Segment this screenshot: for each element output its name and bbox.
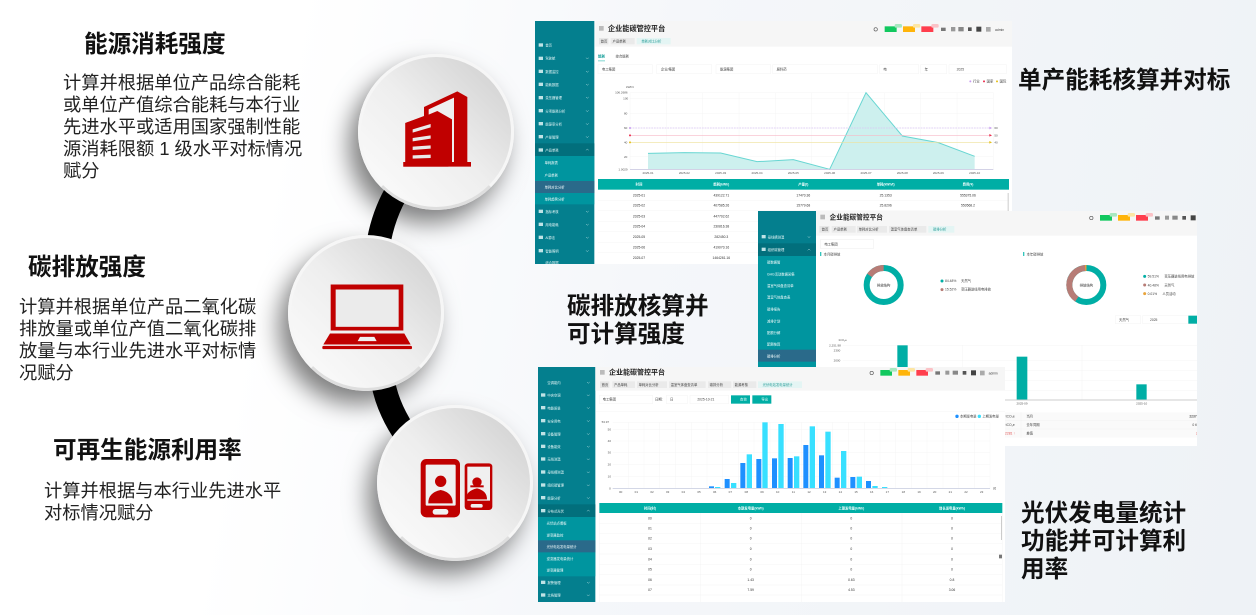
line chart: 1.0029 (618, 167, 628, 171)
sidebar (535, 21, 594, 265)
line chart: 40 (624, 141, 628, 145)
data table: 0.8 (950, 578, 954, 582)
panel: unit energy consumption screenshot: 能源集团 (720, 66, 734, 71)
sidebar: 配额核算 (767, 342, 781, 347)
data table: 0 (750, 557, 752, 561)
heading: energy intensity: 能源消耗强度 (84, 32, 226, 58)
data table: 0 (750, 537, 752, 541)
bar chart: PV generation: 20 (933, 490, 937, 494)
donut: monthly carbon emission: 天然气 (961, 278, 972, 283)
panel: unit energy consumption screenshot: 电工集团 (602, 66, 616, 71)
text block: carbon intensity: 计算并根据单位产品二氧化碳 (19, 296, 256, 317)
sidebar: AI算法 (545, 235, 556, 240)
summary rows: 差值 (1026, 431, 1034, 436)
line chart: 100 (623, 97, 628, 101)
data table: 282450.3 (714, 235, 728, 239)
header bar: 首页 (822, 227, 829, 232)
text block: carbon intensity (19, 296, 256, 383)
data table: 2025-06 (633, 246, 645, 250)
data table: 单耗(kWh/t) (877, 182, 895, 187)
data table: 0 (951, 547, 953, 551)
header bar: 碳排分析 (933, 227, 947, 232)
bar chart: PV generation: 10 (608, 474, 611, 478)
sidebar: 文档管理 (547, 593, 561, 598)
data table: 04 (648, 557, 652, 561)
bar chart: PV generation: 14 (839, 490, 842, 494)
bar chart: PV generation: 30 (608, 451, 611, 455)
data table: 25.8296 (880, 204, 892, 208)
bar chart: monthly carbon: 2000 (834, 358, 841, 362)
bar chart: PV generation: 00 (619, 490, 623, 494)
data table: 0 (750, 568, 752, 572)
text block: energy intensity: 计算并根据单位产品综合能耗 (63, 72, 300, 93)
header bar: 单耗对比分析 (639, 382, 659, 387)
filters (598, 65, 1006, 74)
line chart (615, 79, 1007, 175)
bar chart: PV generation: 18 (902, 490, 905, 494)
query filters: 电工集团 (603, 397, 617, 402)
data table: 0 (951, 557, 953, 561)
line chart: 2025-09 (933, 171, 944, 175)
data table: 0 (850, 547, 852, 551)
data table: 7.59 (747, 588, 754, 592)
bar chart: PV generation: 本期发电量 (960, 413, 977, 418)
summary rows: tCO₂e (1006, 423, 1015, 427)
data table: 3.06 (949, 588, 955, 592)
text block: carbon intensity: 况赋分 (19, 362, 74, 383)
sidebar (758, 211, 816, 446)
sidebar: 设备能效 (547, 444, 561, 449)
donut: yearly carbon emission: 变压器进线用电排放 (1164, 274, 1195, 279)
data table: 1.43 (747, 578, 754, 582)
donut: yearly carbon emission: 本年碳排放 (1027, 251, 1044, 256)
donut: monthly carbon emission: 变压器进线用电排放 (961, 287, 992, 292)
sidebar: 单耗报表 (545, 160, 559, 165)
bar chart: PV generation: 0 (609, 486, 611, 490)
data table: 2025-03 (633, 214, 645, 218)
header bar: admin (995, 28, 1004, 32)
sidebar: 用电能耗 (545, 222, 559, 227)
bar chart: PV generation: 09 (760, 490, 764, 494)
data table: 0 (951, 516, 953, 520)
header bar: 单耗对比分析 (859, 227, 879, 232)
sidebar: GHG活动数据采集 (767, 271, 795, 276)
sidebar: 电能质量 (547, 405, 561, 410)
bar chart: monthly carbon (829, 338, 1197, 405)
bar chart: PV generation: 11 (792, 490, 795, 494)
data table: 时间(时) (644, 505, 656, 510)
line chart: 2025-08 (897, 171, 908, 175)
bar chart: PV generation: 19 (917, 490, 921, 494)
header bar: 首页 (602, 382, 609, 387)
sidebar: 分布式光伏 (547, 508, 565, 513)
bar chart: PV generation: 16 (870, 490, 874, 494)
header bar: 温室气体盘查清单 (891, 227, 918, 232)
tabs: 综合能耗 (616, 53, 630, 58)
data table: 增长发电量(kWh) (939, 505, 965, 510)
label: unit energy consumption: 单产能耗核算并对标 (1018, 68, 1230, 94)
panel: unit energy consumption screenshot: 年 (925, 66, 929, 71)
donut: yearly carbon emission: 59.51% (1148, 275, 1159, 279)
data table: 03 (648, 547, 652, 551)
data table: 0 (850, 537, 852, 541)
bar chart: PV generation: 03 (666, 490, 670, 494)
label: photovoltaic statistics: 功能并可计算利 (1021, 529, 1186, 555)
tabs: 能耗 (598, 53, 605, 58)
bar chart: PV generation: 12 (807, 490, 811, 494)
line chart: 50 (994, 133, 998, 137)
sidebar: 光伏站点看板 (547, 521, 567, 526)
data table: 产量(t) (798, 182, 808, 187)
bar chart: monthly carbon: 2300 (834, 349, 841, 353)
sidebar: 光伏电站发电量统计 (547, 544, 577, 549)
label: photovoltaic statistics: 光伏发电量统计 (1021, 501, 1186, 527)
line chart: 2025-07 (860, 171, 872, 175)
header bar (816, 211, 1197, 236)
sidebar: 安全用电 (547, 418, 561, 423)
line chart: 60 (994, 126, 998, 130)
sidebar: 单耗趋势分析 (545, 196, 565, 201)
data table: 0.63 (848, 578, 855, 582)
icon: building (403, 91, 471, 167)
summary rows: 去年同期 (1026, 422, 1040, 427)
line chart: 2025-04 (751, 171, 763, 175)
data table: 407585.26 (713, 204, 729, 208)
bar chart: PV generation: 40 (608, 439, 611, 443)
query filters: 导出 (761, 397, 768, 402)
donut: monthly carbon emission: 本月碳排放 (824, 251, 841, 256)
sidebar: 设备管理 (547, 431, 561, 436)
panel: unit energy consumption screenshot (535, 21, 1012, 264)
circle: laptop (288, 235, 444, 391)
data table: 2025-02 (633, 204, 645, 208)
bar chart: PV generation: 06 (713, 490, 717, 494)
query filters: 日期: (655, 397, 663, 402)
bar chart: PV generation: 08 (745, 490, 748, 494)
sidebar: 无线测温 (547, 457, 561, 462)
data table: 0 (850, 557, 852, 561)
circle: devices (377, 405, 533, 561)
bar chart: PV generation: 22 (964, 490, 968, 494)
sidebar: 单耗对比分析 (545, 184, 565, 189)
data table: 01 (648, 527, 652, 531)
header bar: 产品单耗 (614, 382, 628, 387)
sidebar: 逆变器管理 (547, 568, 564, 573)
header bar: 企业能碳管控平台 (608, 24, 665, 33)
bar chart: PV generation: 50 (608, 427, 611, 431)
header bar: 光伏电站发电量统计 (763, 382, 793, 387)
sidebar: 配额分解 (767, 330, 781, 335)
panel: unit energy consumption screenshot: 企业/集团 (661, 66, 676, 71)
bar chart: monthly carbon: 2025-10 (1136, 401, 1148, 405)
chart filters: 天然气 (1119, 317, 1130, 322)
data table (598, 179, 1009, 264)
data table: 230816.38 (713, 225, 729, 229)
bar chart: PV generation: 15 (854, 490, 858, 494)
sidebar: 分项能耗分析 (545, 108, 566, 113)
query filters: 查询 (740, 397, 747, 402)
sidebar: 产量管理 (545, 134, 559, 139)
line chart: 2025-06 (824, 171, 836, 175)
text block: renewable energy ratio: 对标情况赋分 (44, 502, 154, 523)
data table: 0 (850, 527, 852, 531)
data table: 0 (750, 547, 752, 551)
label: carbon accounting: 可计算强度 (567, 322, 685, 348)
header bar: admin (989, 372, 998, 376)
line chart: 2025-03 (715, 171, 727, 175)
label: carbon accounting (567, 293, 709, 348)
sidebar: 碳排报告 (767, 307, 781, 312)
label: photovoltaic statistics: 用率 (1021, 557, 1068, 583)
text block: renewable energy ratio: 计算并根据与本行业先进水平 (44, 480, 281, 501)
sidebar: 智能照明 (545, 248, 559, 253)
sidebar: 能源审分析 (545, 121, 563, 126)
donut: monthly carbon emission: 排放结构 (877, 282, 891, 287)
sidebar: 减排计划 (767, 318, 781, 323)
sidebar: 空调能内 (547, 380, 561, 385)
line chart: 2025-01 (642, 171, 654, 175)
panel: carbon accounting screenshot (758, 211, 1197, 446)
data table: 02 (648, 537, 652, 541)
text block: energy intensity: 先进水平或适用国家强制性能 (63, 116, 300, 137)
line chart: 80 (624, 111, 628, 115)
sidebar: 组织碳管理 (768, 247, 785, 252)
header bar (595, 367, 1005, 391)
line chart: 行业 (973, 79, 980, 84)
heading: carbon intensity: 碳排放强度 (28, 255, 146, 281)
panel: unit energy consumption screenshot: 原料药 (777, 66, 787, 71)
bar chart: PV generation: 17 (886, 490, 889, 494)
sidebar: 指标考核 (545, 209, 559, 214)
bar chart: monthly carbon: 2025-09 (1016, 401, 1028, 405)
data table: 17470.36 (796, 193, 810, 197)
summary rows: 2281 ↑ (1005, 432, 1015, 436)
query filters (596, 395, 1005, 411)
header bar: 产品单耗 (834, 227, 848, 232)
data table: 0 (750, 516, 752, 520)
sidebar: 母线槽测温 (547, 470, 565, 475)
text block: renewable energy ratio (44, 480, 281, 523)
data table: 06 (648, 578, 652, 582)
sidebar: 母线槽测温 (768, 234, 785, 239)
panel: unit energy consumption screenshot: 2025 (957, 67, 964, 71)
data table: 447702.62 (713, 214, 729, 218)
data table: 时间 (636, 182, 643, 187)
bar chart: monthly carbon: tCO₂e (839, 338, 847, 342)
donut: monthly carbon emission (820, 251, 992, 309)
connector: black curved links between circles (368, 190, 410, 436)
data table: 0 (850, 568, 852, 572)
data table: 费用(¥) (963, 182, 973, 187)
donut: monthly carbon emission: 15.52% (945, 288, 956, 292)
panel: unit energy consumption screenshot: 电 (883, 66, 887, 71)
chart filters: 2025 (1150, 318, 1158, 322)
sidebar: 逆变器监控 (547, 532, 564, 537)
line chart: 106.2686 (615, 91, 628, 95)
line chart: 40 (994, 141, 998, 145)
bar chart: PV generation: 02 (650, 490, 654, 494)
sidebar: 能源分析 (547, 495, 561, 500)
sidebar: 报警管理 (547, 580, 561, 585)
sidebar: 能耗数据 (545, 82, 559, 87)
header bar: 企业能碳管控平台 (830, 213, 883, 222)
line chart: 2025-02 (679, 171, 690, 175)
data table: 0 (850, 516, 852, 520)
bar chart: PV generation: 04 (682, 490, 685, 494)
circle: building (358, 54, 514, 210)
data table: 0 (750, 527, 752, 531)
label: carbon accounting: 碳排放核算并 (567, 294, 709, 320)
header bar: 单耗对比分析 (641, 38, 662, 43)
sidebar: 碳排分析 (767, 354, 781, 359)
summary rows: tCO₂e (1006, 415, 1015, 419)
line chart: 60 (624, 126, 628, 130)
icon: laptop (322, 284, 412, 350)
data table: 2025-05 (633, 235, 645, 239)
line chart: 2025-05 (788, 171, 799, 175)
line chart: 20 (624, 155, 628, 159)
heading: renewable energy ratio: 可再生能源利用率 (53, 438, 242, 464)
company selector: 电工集团 (824, 241, 838, 246)
bar chart: PV generation: 上期发电量 (982, 413, 1000, 418)
query filters: 日 (670, 398, 673, 402)
sidebar: 中央空调 (547, 393, 561, 398)
bar chart: PV generation: 20 (608, 463, 611, 467)
text block: carbon intensity: 放量与本行业先进水平对标情 (19, 340, 256, 361)
header bar: 能源考核 (735, 382, 749, 387)
data table: 07 (648, 588, 652, 592)
bar chart: PV generation: 23 (980, 490, 984, 494)
text block: carbon intensity: 排放量或单位产值二氧化碳排 (19, 318, 256, 339)
sidebar: 首页 (545, 43, 553, 48)
header bar (595, 21, 1012, 47)
summary rows (1005, 412, 1212, 438)
bar chart: monthly carbon: 2,251.98 (829, 343, 841, 347)
donut: yearly carbon emission: 0.01% (1148, 292, 1157, 296)
label: photovoltaic statistics (1021, 500, 1186, 583)
data table: 1464281.16 (713, 256, 730, 260)
data table: 05 (648, 568, 652, 572)
data table: 2025-07 (633, 256, 645, 260)
query filters: 2025-10-21 (697, 398, 715, 402)
donut: yearly carbon emission: 天然气 (1164, 282, 1175, 287)
header bar: 碳排分析 (710, 382, 724, 387)
header bar: 首页 (601, 38, 608, 43)
sidebar: 产品单耗 (545, 147, 559, 152)
data table: 上期发电量(kWh) (838, 505, 864, 510)
sidebar: 组织碳管理 (547, 483, 565, 488)
bar chart: PV generation: 01 (635, 490, 638, 494)
chart filters (1115, 316, 1199, 324)
data table: 419070.16 (713, 246, 729, 250)
donut: yearly carbon emission: 人员活动 (1162, 291, 1176, 296)
bar chart: PV generation: 时 (993, 485, 996, 490)
header bar: 企业能碳管控平台 (609, 368, 665, 377)
text block: energy intensity: 或单位产值综合能耗与本行业 (63, 94, 300, 115)
donut: yearly carbon emission: 40.48% (1148, 283, 1159, 287)
bar chart: PV generation: 10 (776, 490, 780, 494)
sidebar: 数据监控 (545, 69, 559, 74)
tabs (598, 53, 630, 61)
icon: devices with people (420, 459, 492, 518)
sidebar: 逆变器发电量统计 (547, 556, 574, 561)
summary rows: 当月 (1026, 414, 1033, 419)
line chart: 2025-10 (969, 171, 981, 175)
data table: 0 (951, 537, 953, 541)
donut: yearly carbon emission: 排放结构 (1080, 282, 1094, 287)
text block: energy intensity: 赋分 (63, 160, 100, 181)
data table: 0 (951, 568, 953, 572)
sidebar: 变压器管理 (545, 95, 563, 100)
data table: 本期发电量(kWh) (738, 505, 764, 510)
bar chart: PV generation: 13 (823, 490, 827, 494)
data table: 2025-04 (633, 225, 645, 229)
data table: 25.1353 (880, 193, 892, 197)
company selector (820, 240, 874, 248)
sidebar: 温室气体盘查清单 (767, 283, 794, 288)
data table: 4.53 (848, 588, 855, 592)
line chart: kWh/t (626, 85, 634, 89)
data table: 能耗(kWh) (713, 182, 729, 187)
sidebar: 碳数据管 (767, 260, 781, 265)
line chart: 国际 (1000, 79, 1007, 84)
data table (599, 503, 1002, 602)
line chart: 国家 (987, 79, 994, 84)
bar chart: PV generation (602, 413, 1000, 494)
sidebar: 产品单耗 (545, 172, 559, 177)
data table: 0 (951, 527, 953, 531)
sidebar: 温室气体盘查表 (767, 295, 791, 300)
data table: 2025-01 (633, 193, 645, 197)
panel: photovoltaic generation screenshot (538, 367, 1005, 602)
data table: 555375.06 (960, 193, 976, 197)
donut: monthly carbon emission: 84.48% (945, 279, 956, 283)
donut: yearly carbon emission (1023, 251, 1195, 309)
bar chart: PV generation: 05 (697, 490, 701, 494)
sidebar (538, 367, 595, 602)
data table: 550568.2 (961, 204, 975, 208)
data table: 15779.68 (796, 204, 810, 208)
bar chart: PV generation: 53.97 (602, 420, 609, 424)
bar chart: PV generation: 07 (729, 490, 732, 494)
bar chart: PV generation: 21 (949, 490, 952, 494)
text block: energy intensity: 源消耗限额 1 级水平对标情况 (63, 138, 302, 159)
data table: 00 (648, 516, 652, 520)
header bar: 产品单耗 (613, 38, 627, 43)
header bar: 温室气体盘查清单 (671, 382, 698, 387)
text block: energy intensity (63, 72, 302, 181)
sidebar: 驾驶舱 (545, 56, 556, 61)
data table: 439122.71 (713, 193, 729, 197)
